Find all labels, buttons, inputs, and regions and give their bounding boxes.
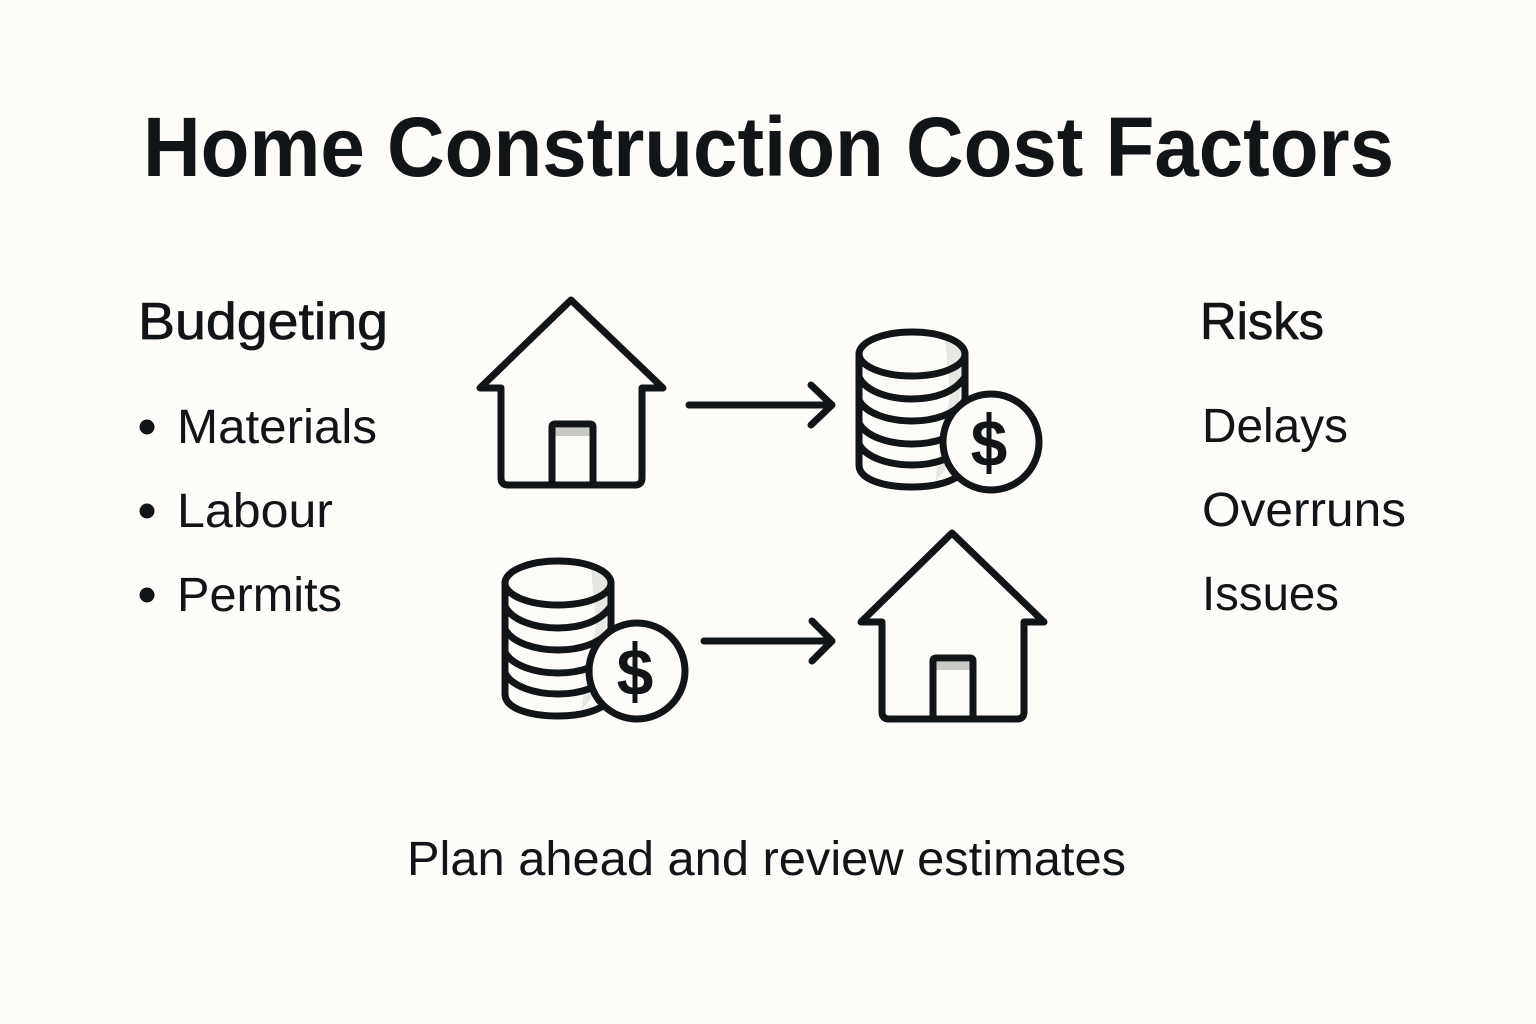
list item: overruns: Overruns — [1202, 484, 1406, 537]
icon: coins and dollar bottom: $ — [617, 635, 653, 709]
title: Home Construction Cost Factors — [143, 100, 1394, 194]
panel: risks — [1200, 293, 1406, 621]
heading: risks: Risks — [1200, 293, 1324, 351]
arrow: coins to house — [704, 621, 832, 661]
icon: coins and dollar bottom — [505, 561, 685, 719]
icon: house top — [480, 300, 663, 485]
list item: permits: Permits — [177, 569, 342, 622]
icon: coins and dollar top — [859, 332, 1039, 490]
list item: materials: Materials — [177, 401, 377, 454]
panel: budgeting — [138, 293, 388, 622]
list item: issues: Issues — [1202, 568, 1339, 621]
icon: coins and dollar top: $ — [971, 406, 1007, 480]
list item: labour: Labour — [177, 485, 333, 538]
icon: house bottom — [861, 533, 1044, 719]
list item: delays: Delays — [1202, 400, 1348, 453]
arrow: house to coins — [689, 385, 832, 425]
footer note: Plan ahead and review estimates — [407, 833, 1126, 886]
heading: budgeting: Budgeting — [138, 293, 388, 351]
